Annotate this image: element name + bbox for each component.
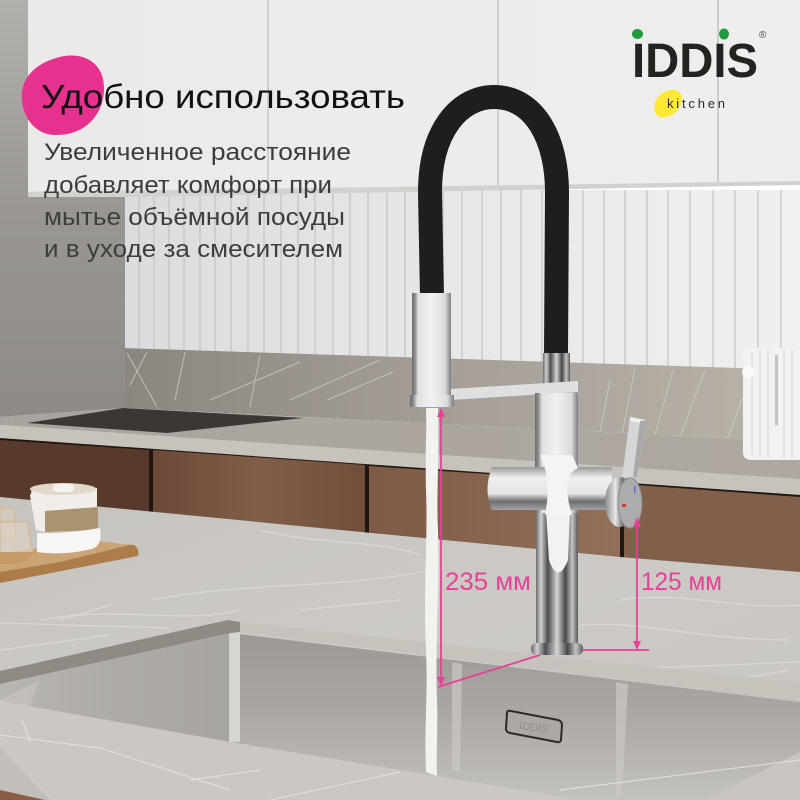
description text: Увеличенное расстояние [44, 139, 351, 166]
slatted wall panel [125, 190, 800, 370]
logo wordmark: IDDIS [632, 35, 758, 88]
dimension lines [437, 408, 649, 687]
island countertop [0, 497, 800, 800]
back countertop [0, 408, 800, 496]
pull-out spray head [412, 293, 451, 397]
temperature dial [605, 477, 642, 528]
sink rim: back stone edge [240, 622, 800, 702]
marble backsplash [125, 348, 800, 442]
spray arm [450, 381, 578, 400]
sink rim: left stone edge [0, 620, 240, 684]
label 235 mm: 235 мм [445, 568, 531, 596]
heading: Удобно использовать [41, 78, 405, 115]
wood drawers [0, 438, 800, 580]
sink corner highlight [229, 632, 240, 742]
registered mark: ® [759, 30, 767, 41]
hose collar [543, 353, 570, 384]
side handle [622, 417, 646, 478]
spray head ring [410, 395, 454, 407]
faucet [410, 97, 646, 655]
base line [583, 649, 649, 651]
sink drain badge: IDDIS [518, 720, 549, 736]
yellow blob [654, 90, 682, 117]
logo green dots [632, 29, 729, 40]
sink basin [0, 632, 800, 800]
diagonal dimension [438, 655, 540, 687]
cross body [488, 467, 612, 510]
wooden tray [0, 541, 138, 583]
water stream [425, 408, 439, 776]
upper cabinets [28, 0, 800, 197]
black flexible hose [430, 97, 557, 354]
kettle [30, 483, 101, 553]
logo [632, 29, 767, 117]
front countertop [0, 701, 800, 800]
description text [44, 139, 351, 263]
sink drain badge [506, 711, 562, 742]
kitchen label: kitchen [667, 96, 725, 111]
column reflection [546, 510, 570, 572]
background wall [0, 0, 125, 417]
label 125 mm: 125 мм [641, 568, 722, 596]
description text: мытье объёмной посуды [44, 204, 345, 231]
235 mm arrow [440, 412, 442, 684]
base ring [531, 643, 583, 655]
125 mm arrow [636, 522, 638, 648]
toaster [742, 348, 800, 460]
235 mm arrow heads [437, 408, 445, 686]
glass cups [0, 508, 33, 564]
description text: и в уходе за смесителем [44, 236, 343, 263]
center highlight [540, 455, 578, 515]
induction hob [27, 408, 303, 433]
marble veins [0, 530, 800, 690]
125 mm arrow heads [633, 517, 641, 650]
lower column [536, 505, 578, 647]
description text: добавляет комфорт при [44, 172, 332, 199]
pink blob [22, 56, 104, 135]
upper column [535, 393, 578, 513]
